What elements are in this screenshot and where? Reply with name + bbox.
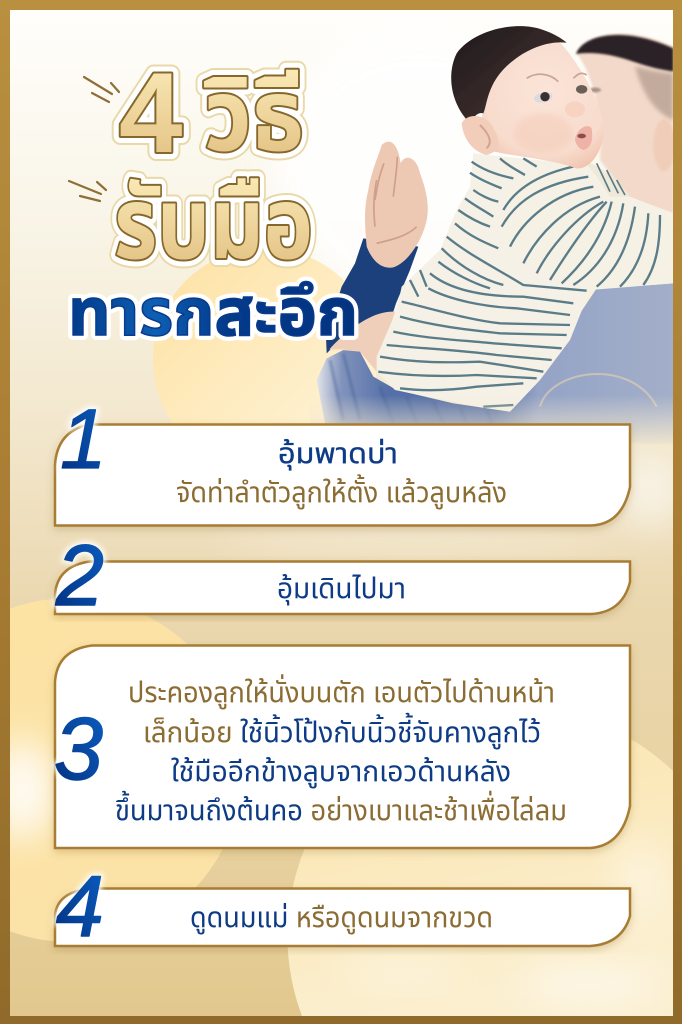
- step 2 number: 2: [55, 528, 104, 624]
- title: 4 วิธี: 4: [119, 50, 182, 177]
- step 2 text: อุ้มเดินไปมา: [277, 573, 406, 605]
- step 4 text: ดูดนมแม่ หรือดูดนมจากขวด: [190, 902, 493, 935]
- step 3 number: 3: [54, 699, 103, 798]
- title: ทารกสะอึก: ทารกสะอึก: [68, 275, 358, 349]
- baby nose and mouth: [565, 101, 585, 117]
- step 3 text: [115, 674, 567, 827]
- panel: step 3: [54, 646, 630, 848]
- panel: step 1: [55, 392, 630, 526]
- title: 4 วิธี: วิธี: [204, 60, 304, 172]
- title: รับมือ: รับมือ: [114, 168, 313, 280]
- title: 4 วิธี: 4: [119, 50, 182, 177]
- title: ทารกสะอึก: ทารกสะอึก: [68, 275, 358, 349]
- title: 4 วิธี: วิธี: [204, 60, 304, 172]
- title: รับมือ: รับมือ: [114, 168, 313, 280]
- step 1 text: [176, 438, 507, 510]
- lens flare on sleeve: [540, 374, 657, 407]
- step 3 text: ขึ้นมาจนถึงต้นคอ อย่างเบาและช้าเพื่อไล่ลม: [115, 790, 567, 827]
- step 3 number: 3: [54, 699, 103, 798]
- father's navy sleeve: [326, 238, 418, 353]
- icon: accent lines upper: [84, 77, 119, 102]
- baby sleeve: [648, 283, 673, 286]
- photo: father holding baby: [310, 26, 675, 445]
- baby ear: [462, 116, 499, 155]
- baby eyes: [534, 92, 552, 102]
- step 3 text: เล็กน้อย ใช้นิ้วโป้งกับนิ้วชี้จับคางลูกไว้: [143, 712, 541, 750]
- step 1 number: 1: [60, 392, 107, 486]
- step 1 text: จัดท่าลำตัวลูกให้ตั้ง แล้วลูบหลัง: [176, 474, 507, 510]
- icon: accent lines lower: [69, 181, 106, 201]
- father's raised hand: [365, 142, 428, 268]
- panel: step 2: [55, 528, 630, 624]
- step 4 number: 4: [56, 859, 104, 955]
- title: 4 วิธี: 4: [119, 50, 182, 177]
- baby head: [451, 26, 603, 168]
- title: 4 วิธี: [119, 50, 304, 177]
- step 1 number: 1: [60, 392, 107, 486]
- title: รับมือ: รับมือ: [114, 168, 313, 280]
- shirt sleeve ribs: [328, 353, 408, 420]
- step 2 number: 2: [55, 528, 104, 624]
- step 4 number: 4: [56, 859, 104, 955]
- stripes on body: [378, 158, 587, 407]
- panel: step 4: [55, 859, 630, 955]
- father's head: [576, 34, 675, 213]
- step 1 text: อุ้มพาดบ่า: [278, 438, 398, 470]
- father's blue shirt: [317, 282, 673, 443]
- title: 4 วิธี: วิธี: [204, 60, 304, 172]
- father's forearm: [329, 312, 395, 372]
- step 3 text: ใช้มืออีกข้างลูบจากเอวด้านหลัง: [171, 756, 511, 789]
- step 3 text: ประคองลูกให้นั่งบนตัก เอนตัวไปด้านหน้า: [128, 674, 555, 710]
- baby outfit: [377, 153, 673, 412]
